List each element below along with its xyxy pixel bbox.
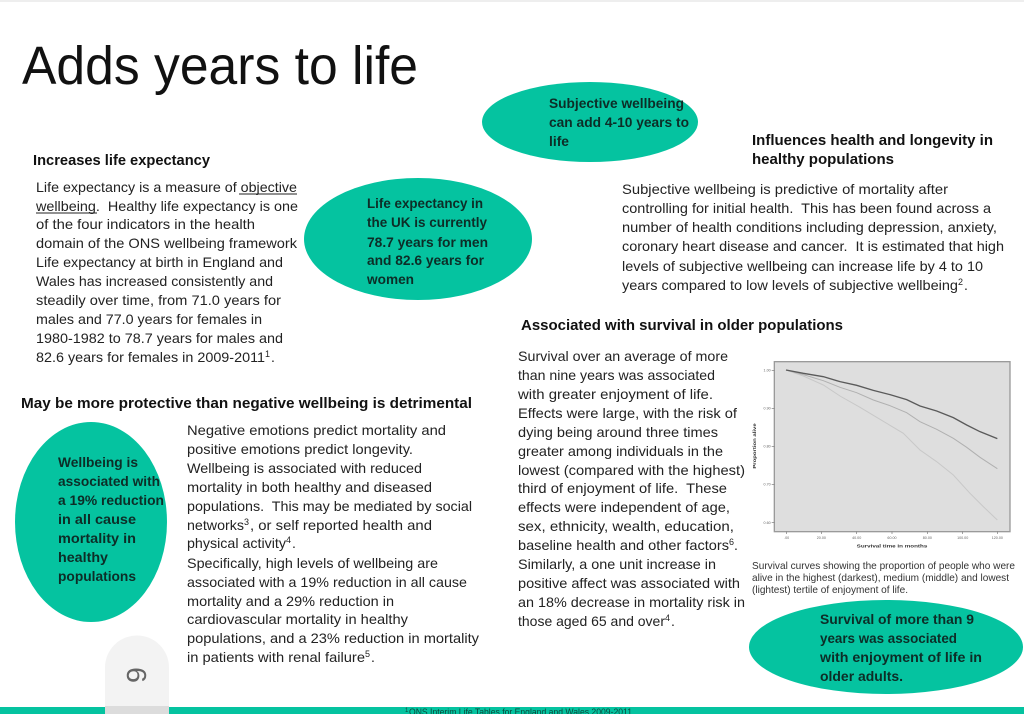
heading: increases life expectancy: Increases life expectancy [33,153,210,169]
callout: survival and enjoyment of life: older adults. [820,668,903,684]
text block: predictive of mortality: levels of subjective wellbeing can increase life by 4 to 10 [622,258,983,274]
text block: protective wellbeing: 4 [286,535,291,545]
text block: life expectancy: Life expectancy is a measure of objective [36,179,297,195]
callout: life expectancy in the UK [304,178,532,300]
text block: life expectancy: 1 [265,349,270,359]
footnote: 1 [405,708,409,714]
curve: medium tertile [786,370,997,469]
heading: influences health and longevity [752,133,993,168]
text block: survival: . [734,537,738,553]
text block: survival: lowest (compared with the highest) [518,462,745,478]
chart: survival curves [752,362,1010,550]
axis labels: Survival time in months [857,544,928,550]
chart caption: alive in the highest (darkest), medium (middle) and lowest [752,572,1009,584]
text block: life expectancy: of the four indicators in the health [36,216,255,232]
callout: subjective wellbeing adds years: Subjective wellbeing [549,95,684,111]
text block: protective wellbeing: in patients with renal failure [187,649,365,665]
text block: life expectancy: . [271,349,275,365]
text block: protective wellbeing: associated with a 19% reduction in all cause [187,574,467,590]
text block: survival: those aged 65 and over [518,613,665,629]
panel: associated with survival [517,318,843,629]
text block: life expectancy: domain of the ONS wellbeing framework [36,235,298,251]
title: Adds years to life [22,36,418,96]
text block: life expectancy: 82.6 years for females in 2009-2011 [36,349,265,365]
text block: protective wellbeing: mortality and a 29% reduction in [187,593,394,609]
axis labels: 1.00 [764,369,771,373]
chart caption [752,560,1015,596]
text block: survival: Effects were large, with the risk of [518,405,737,421]
axis labels: 0.60 [764,521,771,525]
text block: protective wellbeing: positive emotions predict longevity. [187,441,413,457]
axis labels: 60.00 [887,536,897,540]
callout: survival and enjoyment of life: years was associated [820,630,957,646]
curve: lowest tertile [786,370,997,520]
footer bar [0,707,1024,714]
chart caption: (lightest) tertile of enjoyment of life. [752,584,908,596]
text block: protective wellbeing: 5 [365,649,370,659]
callout: subjective wellbeing adds years: can add 4-10 years to [549,114,689,130]
text block: survival: than nine years was associated [518,367,715,383]
text block: survival: Similarly, a one unit increase in [518,556,716,572]
text block: protective wellbeing: physical activity [187,535,286,551]
axis labels: 40.00 [852,536,861,540]
callout: 19% reduction: associated with [58,473,160,489]
text block: predictive of mortality: years compared to low levels of subjective wellbeing [622,277,958,293]
text block: survival: 6 [729,537,734,547]
callout: subjective wellbeing adds years [482,82,698,162]
text block: protective wellbeing: . [292,535,296,551]
text block: protective wellbeing: Specifically, high levels of wellbeing are [187,555,438,571]
text block: survival: Survival over an average of more [518,348,728,364]
callout: 19% reduction: mortality in [58,530,136,546]
text block: survival: effects were independent of age, [518,499,730,515]
text block: protective wellbeing: populations. This may be mediated by social [187,498,472,514]
callout: life expectancy in the UK: the UK is currently [367,214,487,230]
text block: predictive of mortality [622,181,1004,293]
text block: predictive of mortality: number of health conditions including depression, anxiety, [622,219,997,235]
text block: survival: 4 [665,613,670,623]
callout: subjective wellbeing adds years: life [549,133,569,149]
text block: protective wellbeing: , or self reported health and [250,517,432,533]
axis labels: 0.70 [764,483,771,487]
text block: predictive of mortality: controlling for initial health. This has been found across a [622,200,991,216]
callout: life expectancy in the UK: women [366,271,414,287]
text block: life expectancy: Wales has increased consistently and [36,273,273,289]
text block: survival: dying being around three times [518,424,718,440]
page number tab [105,636,169,714]
text block: predictive of mortality: coronary heart disease and cancer. It is estimated that high [622,238,1004,254]
panel: protective wellbeing [21,396,479,665]
callout: life expectancy in the UK: Life expectancy in [367,195,483,211]
text block: survival: third of enjoyment of life. These [518,480,727,496]
heading: influences health and longevity: Influences health and longevity in [752,133,993,149]
panel: increases life expectancy [33,153,298,365]
text block: protective wellbeing: networks [187,517,244,533]
chart caption: Survival curves showing the proportion of people who were [752,560,1015,572]
curve: highest tertile [786,370,997,439]
text block: protective wellbeing: Negative emotions predict mortality and [187,422,446,438]
text block: protective wellbeing: cardiovascular mortality in healthy [187,611,408,627]
text block: life expectancy: 1980-1982 to 78.7 years for males and [36,330,283,346]
text block: survival: baseline health and other factors [518,537,729,553]
text block: life expectancy: steadily over time, from 71.0 years for [36,292,281,308]
text block: life expectancy: wellbeing. Healthy life expectancy is one [35,198,298,214]
page number tab: 6 [121,667,152,683]
axis labels: 100.00 [957,536,968,540]
text block: protective wellbeing: mortality in both healthy and diseased [187,479,432,495]
text block: protective wellbeing: 3 [244,517,249,527]
text block: survival: with greater enjoyment of life. [517,386,713,402]
axis labels: 0.80 [764,445,771,449]
text block: survival: . [671,613,675,629]
callout: 19% reduction [15,422,167,622]
axis labels: 80.00 [923,536,932,540]
callout: life expectancy in the UK: and 82.6 years for [367,252,485,268]
axis labels [752,369,1003,550]
text block: survival: an 18% decrease in mortality risk in [518,594,745,610]
text block: protective wellbeing: Wellbeing is associated with reduced [187,460,422,476]
text block: survival [517,348,745,629]
callout: 19% reduction: a 19% reduction [58,492,164,508]
text block: survival: positive affect was associated with [518,575,740,591]
axis labels: Proportion alive [752,423,758,469]
text block: predictive of mortality: . [964,277,968,293]
panel: influences health and longevity [622,133,1004,293]
text block: predictive of mortality: Subjective wellbeing is predictive of mortality after [622,181,948,197]
axis labels: 20.00 [817,536,826,540]
callout: survival and enjoyment of life: Survival of more than 9 [820,611,974,627]
heading: protective wellbeing: May be more protective than negative wellbeing is detrimental [21,396,472,412]
text block: protective wellbeing: . [371,649,375,665]
text block: predictive of mortality: 2 [958,277,963,287]
text block: protective wellbeing [187,422,479,665]
text block: survival: sex, ethnicity, wealth, education, [518,518,734,534]
callout: 19% reduction: healthy [58,549,108,565]
text block: life expectancy: Life expectancy at birth in England and [36,254,283,270]
callout: survival and enjoyment of life: with enjoyment of life in [819,649,982,665]
text block: life expectancy: males and 77.0 years for females in [36,311,262,327]
text block: protective wellbeing: populations, and a 23% reduction in mortality [187,630,479,646]
text block: survival: greater among individuals in the [518,443,723,459]
text block: life expectancy [35,179,298,365]
axis labels: 120.00 [992,536,1003,540]
heading: influences health and longevity: healthy populations [752,152,894,168]
heading: associated with survival: Associated with survival in older populations [521,318,843,334]
axis labels: 0.90 [764,407,771,411]
axis labels: .00 [784,536,789,540]
callout: 19% reduction: Wellbeing is [58,454,138,470]
callout: 19% reduction: in all cause [58,511,136,527]
callout: life expectancy in the UK: 78.7 years for men [367,234,488,250]
callout: survival and enjoyment of life [749,600,1023,694]
callout: 19% reduction: populations [58,568,136,584]
